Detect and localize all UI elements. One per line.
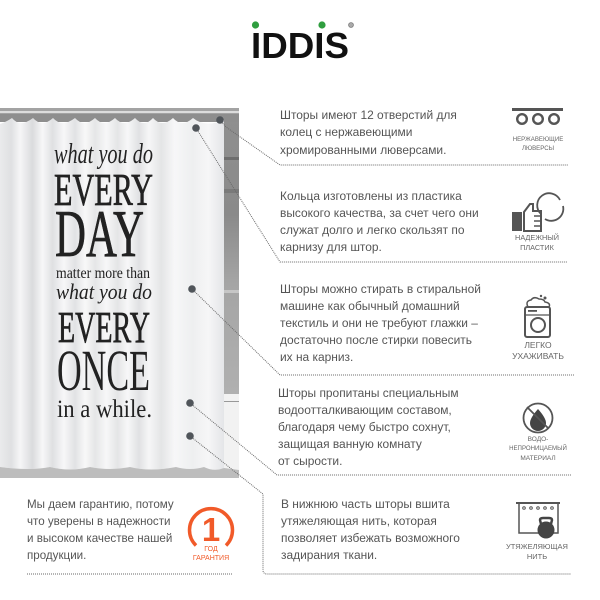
icon: one year guarantee badge: ГАРАНТИЯ <box>193 555 229 562</box>
floor strip <box>0 467 239 478</box>
icon: thumb up with ring: НАДЕЖНЫЙ <box>515 233 559 242</box>
curtain lettering: ONCE <box>57 338 150 403</box>
icon: grommets: ЛЮВЕРСЫ <box>522 145 554 152</box>
icon: one year guarantee badge: 1 <box>202 511 220 548</box>
text block: guarantee: что уверены в надежности <box>27 515 171 528</box>
curtain lettering: what you do <box>56 279 152 304</box>
icon: washing machine <box>512 295 564 361</box>
text block: weighted thread <box>281 497 460 562</box>
text block: grommets: Шторы имеют 12 отверстий для <box>280 108 457 122</box>
text block: water repellent: благодаря чему быстро сохнут, <box>278 420 451 434</box>
curtain lettering: EVERY <box>58 303 150 352</box>
bathroom background <box>0 108 239 478</box>
text block: weighted thread: задирания ткани. <box>281 548 377 562</box>
curtain lettering <box>54 138 153 423</box>
icon: water-repellent drop: ВОДО- <box>528 436 548 443</box>
curtain lettering: DAY <box>55 197 144 271</box>
icon: weighted thread with kettlebell: УТЯЖЕЛЯЮЩАЯ <box>506 542 568 551</box>
text block: rings: карнизу для штор. <box>280 240 382 254</box>
text block: washing: достаточно после стирки повесить <box>280 333 472 347</box>
text block: grommets <box>280 108 457 157</box>
icon: one year guarantee badge: ГОД <box>204 546 218 553</box>
icon: water-repellent drop <box>509 404 567 462</box>
text block: water repellent: водоотталкивающим составом, <box>278 403 452 417</box>
curtain lettering: matter more than <box>56 265 150 282</box>
text block: rings <box>280 189 479 254</box>
text block: washing: текстиль и они не требуют глажки – <box>280 316 478 330</box>
icon: washing machine: УХАЖИВАТЬ <box>512 351 564 361</box>
text block: water repellent: Шторы пропитаны специальным <box>278 386 459 400</box>
icon: thumb up with ring: ПЛАСТИК <box>520 243 555 252</box>
text block: weighted thread: позволяет избежать возможного <box>281 531 460 545</box>
curtain rod <box>0 108 239 114</box>
text block: water repellent: от сырости. <box>278 454 342 468</box>
text block: guarantee: и высоком качестве нашей <box>27 532 172 545</box>
text block: washing <box>280 282 481 364</box>
curtain lettering: in a while. <box>57 396 152 423</box>
text block: weighted thread: В нижнюю часть шторы вшита <box>281 497 450 511</box>
text block: grommets: хромированными люверсами. <box>280 143 446 157</box>
logo: IDDIS: IDDIS <box>251 25 349 66</box>
text block: rings: служат долго и легко скользят по <box>280 223 465 237</box>
curtain fabric <box>0 118 224 470</box>
text block: guarantee: продукции. <box>27 549 86 562</box>
leader lines with dots <box>27 116 574 574</box>
icon: weighted thread with kettlebell <box>506 502 568 561</box>
icon: one year guarantee badge <box>190 509 232 562</box>
icon: grommets: НЕРЖАВЕЮЩИЕ <box>513 136 563 143</box>
curtain lettering: what you do <box>54 138 153 170</box>
text block: washing: Шторы можно стирать в стиральной <box>280 282 481 296</box>
icon: thumb up with ring <box>512 193 563 252</box>
text block: guarantee <box>27 498 174 562</box>
text block: washing: машине как обычный домашний <box>280 299 460 313</box>
icon: weighted thread with kettlebell: НИТЬ <box>527 552 547 561</box>
panel: curtain photo <box>0 108 239 478</box>
text block: rings: Кольца изготовлены из пластика <box>280 189 462 203</box>
text block: weighted thread: утяжеляющая нить, которая <box>281 514 437 528</box>
text block: water repellent: защищая ванную комнату <box>278 437 422 451</box>
text block: rings: высокого качества, за счет чего они <box>280 206 479 220</box>
icon: water-repellent drop: НЕПРОНИЦАЕМЫЙ <box>509 444 567 452</box>
text block: water repellent <box>278 386 459 468</box>
text block: guarantee: Мы даем гарантию, потому <box>27 498 174 511</box>
icon: water-repellent drop: МАТЕРИАЛ <box>520 455 556 462</box>
text block: washing: их на карниз. <box>280 350 353 364</box>
text block: grommets: колец с нержавеющими <box>280 125 412 139</box>
curtain lettering: EVERY <box>54 165 153 215</box>
icon: grommets <box>512 108 563 152</box>
icon: washing machine: ЛЕГКО <box>524 340 552 350</box>
